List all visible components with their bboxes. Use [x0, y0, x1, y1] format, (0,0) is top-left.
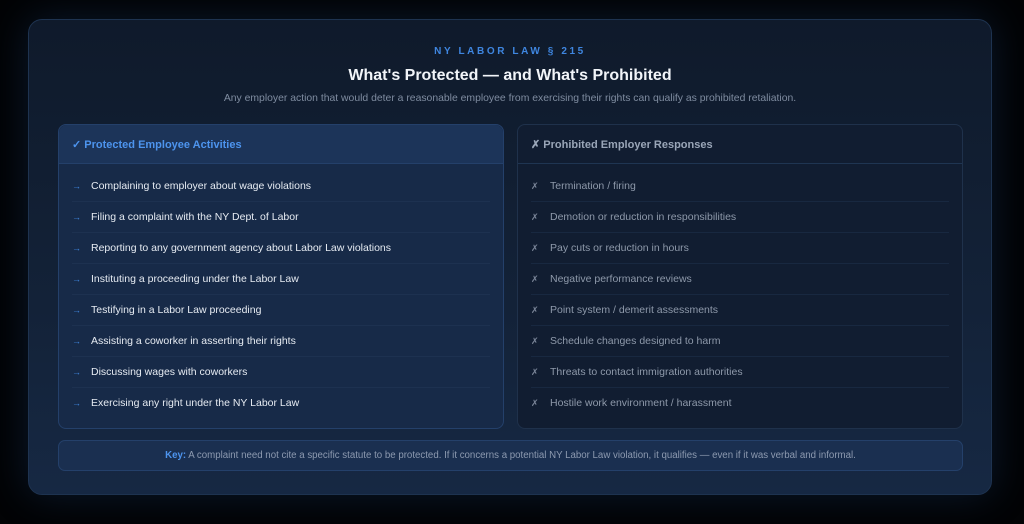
list: prohibited responses: Pay cuts or reduction in hours — [550, 242, 689, 254]
panel heading: protected — [59, 125, 503, 164]
list: protected activities: → — [72, 181, 81, 191]
key callout: Key: A complaint need not cite a specific statute to be protected. If it concerns a potential NY Labor Law violation, it qualifies — even if it was verbal and informal. — [165, 450, 856, 461]
list: protected activities: Instituting a proceeding under the Labor Law — [91, 273, 299, 285]
list: prohibited responses: ✗ — [531, 398, 539, 408]
list: protected activities: → — [72, 336, 81, 346]
title: What's Protected — and What's Prohibited — [348, 67, 672, 84]
list: protected activities — [72, 180, 391, 409]
list: protected activities: → — [72, 274, 81, 284]
list: protected activities: Reporting to any government agency about Labor Law violations — [91, 242, 391, 254]
list: protected activities: Exercising any right under the NY Labor Law — [91, 397, 299, 409]
panel heading: prohibited: ✗ Prohibited Employer Responses — [531, 139, 713, 151]
list: protected activities: Assisting a coworker in asserting their rights — [91, 335, 296, 347]
key callout — [58, 440, 963, 471]
list: protected activities: Filing a complaint with the NY Dept. of Labor — [91, 211, 299, 223]
list: prohibited responses: ✗ — [531, 336, 539, 346]
list: prohibited responses: ✗ — [531, 305, 539, 315]
list: prohibited responses: ✗ — [531, 212, 539, 222]
list: prohibited responses: Negative performance reviews — [550, 273, 692, 285]
list: prohibited responses: ✗ — [531, 181, 539, 191]
panel heading: protected: ✓ Protected Employee Activities — [72, 139, 242, 151]
eyebrow label: NY LABOR LAW § 215 — [434, 46, 586, 57]
panel: protected activities — [58, 124, 504, 429]
list: protected activities: → — [72, 367, 81, 377]
list: prohibited responses: ✗ — [531, 274, 539, 284]
list: prohibited responses: Hostile work environment / harassment — [550, 397, 732, 409]
panel heading: prohibited — [518, 125, 962, 164]
list: prohibited responses: Schedule changes designed to harm — [550, 335, 720, 347]
list: protected activities: → — [72, 212, 81, 222]
list: prohibited responses: ✗ — [531, 243, 539, 253]
list: protected activities: → — [72, 305, 81, 315]
list: prohibited responses — [531, 180, 949, 409]
panel: prohibited responses — [517, 124, 963, 429]
list: prohibited responses: Point system / demerit assessments — [550, 304, 718, 316]
list: protected activities: → — [72, 243, 81, 253]
list: protected activities: Testifying in a Labor Law proceeding — [91, 304, 261, 316]
list: protected activities: Complaining to employer about wage violations — [91, 180, 311, 192]
list: prohibited responses: Termination / firing — [550, 180, 636, 192]
list: prohibited responses: ✗ — [531, 367, 539, 377]
subtitle: Any employer action that would deter a reasonable employee from exercising their rights can qualify as prohibited retaliation. — [224, 93, 796, 104]
list: prohibited responses: Threats to contact immigration authorities — [550, 366, 743, 378]
list: protected activities: Discussing wages with coworkers — [91, 366, 247, 378]
list: protected activities: → — [72, 398, 81, 408]
list: prohibited responses: Demotion or reduction in responsibilities — [550, 211, 736, 223]
